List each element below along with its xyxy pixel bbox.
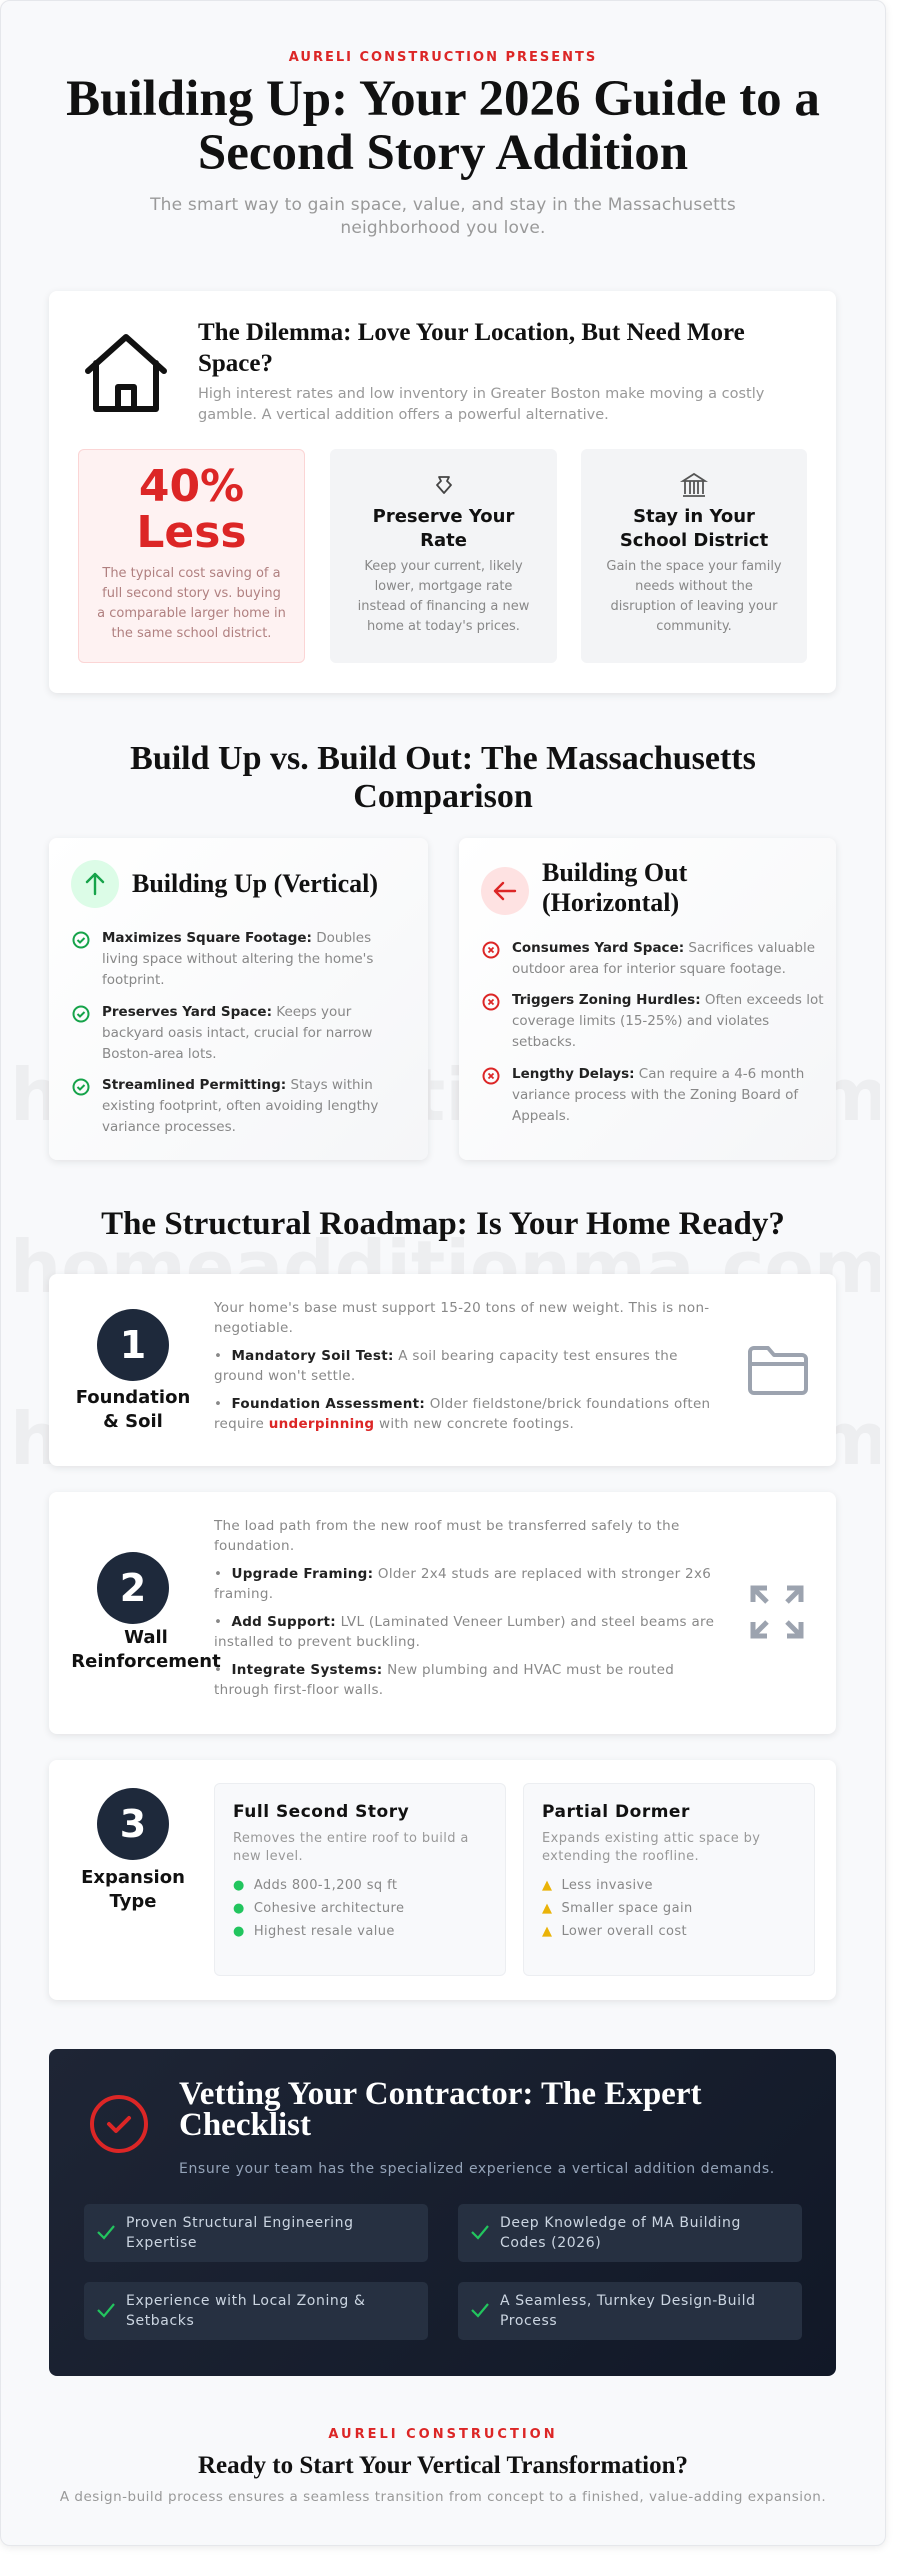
stat: school district <box>581 449 807 663</box>
check item 2 <box>458 2204 802 2262</box>
label: Expansion <box>81 1867 185 1888</box>
text <box>214 1518 714 1698</box>
heading: (Horizontal) <box>542 888 679 917</box>
badge 1: 1 <box>120 1323 146 1367</box>
subcard: full second story: ● Adds 800-1,200 sq ft <box>233 1878 397 1893</box>
stat: school district: Stay in Your <box>633 506 755 527</box>
heading: dilemma: The Dilemma: Love Your Location, But Need More Space? <box>198 319 745 377</box>
panel: step 1 foundation <box>49 1274 836 1466</box>
icon: folder <box>748 1346 808 1395</box>
stat: preserve rate: Keep your current, likely lower, mortgage rate instead of financing a new home at today's prices. <box>358 559 529 634</box>
subcard: full second story <box>214 1783 506 1976</box>
icon: expand arrows <box>750 1586 804 1638</box>
item 1: Maximizes Square Footage: Doubles living space without altering the home's footprint. <box>102 930 373 988</box>
subcard: full second story: ● Cohesive architecture <box>233 1901 404 1916</box>
subtitle: The smart way to gain space, value, and stay in the Massachusetts neighborhood you love. <box>150 195 736 238</box>
subcard: full second story: Removes the entire roof to build a new level. <box>233 1831 469 1864</box>
label <box>81 1867 185 1912</box>
badge 3: 3 <box>120 1802 146 1846</box>
subtext: Ensure your team has the specialized experience a vertical addition demands. <box>179 2161 775 2177</box>
panel: building out <box>459 838 836 1160</box>
text: Your home's base must support 15-20 tons of new weight. This is non-negotiable. <box>214 1300 709 1336</box>
icon: check circle <box>90 2095 148 2153</box>
badge 2: 2 <box>120 1566 146 1610</box>
label <box>76 1387 190 1432</box>
panel: dilemma <box>49 291 836 693</box>
text: • Mandatory Soil Test: A soil bearing capacity test ensures the ground won't settle. <box>214 1348 678 1384</box>
item 2: Preserves Yard Space: Keeps your backyard oasis intact, crucial for narrow Boston-area lots. <box>102 1004 372 1062</box>
check item 2: Deep Knowledge of MA Building Codes (2026) <box>500 2215 741 2251</box>
icon: school building <box>680 473 708 497</box>
item 3: Lengthy Delays: Can require a 4-6 month variance process with the Zoning Board of Appeals. <box>512 1066 804 1124</box>
text: • Foundation Assessment: Older fieldstone/brick foundations often require underpinning with new concrete footings. <box>214 1396 710 1432</box>
badge 1 <box>97 1309 169 1381</box>
stat: 40% less: The typical cost saving of a full second story vs. buying a comparable larger home in the same school district. <box>97 566 286 641</box>
item 2: Triggers Zoning Hurdles: Often exceeds lot coverage limits (15-25%) and violates setbacks. <box>512 992 824 1050</box>
check item 4: A Seamless, Turnkey Design-Build Process <box>500 2293 756 2329</box>
icon: house <box>85 334 167 412</box>
check item 1 <box>84 2204 428 2262</box>
check item 3: Experience with Local Zoning & Setbacks <box>126 2293 365 2329</box>
icon: up arrow <box>71 860 119 908</box>
stat: preserve rate: Rate <box>420 530 467 551</box>
icon: left arrow <box>481 867 529 915</box>
stat: preserve rate <box>330 449 557 663</box>
item 3: Streamlined Permitting: Stays within existing footprint, often avoiding lengthy variance processes. <box>102 1077 378 1135</box>
text: homeadditionma.com <box>10 1397 880 1481</box>
stat: school district: Gain the space your family needs without the disruption of leaving your community. <box>606 559 782 634</box>
text: The load path from the new roof must be transferred safely to the foundation. <box>214 1518 680 1554</box>
subcard: partial dormer: Partial Dormer <box>542 1802 690 1822</box>
footer heading: Ready to Start Your Vertical Transformation? <box>198 2452 688 2479</box>
subcard: partial dormer: ▲ Lower overall cost <box>542 1924 687 1939</box>
badge 2 <box>97 1552 169 1624</box>
heading: comparison: Build Up vs. Build Out: The Massachusetts Comparison <box>130 740 756 815</box>
stat: 40% less: Less <box>136 507 247 558</box>
subcard: partial dormer: Expands existing attic space by extending the roofline. <box>542 1831 760 1864</box>
stat: 40% less: 40% <box>139 461 244 512</box>
panel: building up <box>49 838 428 1160</box>
badge 3 <box>97 1788 169 1860</box>
label: Wall <box>124 1627 168 1648</box>
subcard: full second story: Full Second Story <box>233 1802 409 1822</box>
text: homeadditionma.com <box>10 1225 880 1309</box>
stat: 40% less <box>78 449 305 663</box>
heading: Building Up (Vertical) <box>132 869 378 898</box>
text <box>214 1300 710 1432</box>
label: Reinforcement <box>71 1651 221 1672</box>
subcard: full second story: ● Highest resale value <box>233 1924 395 1939</box>
check item 1: Proven Structural Engineering Expertise <box>126 2215 354 2251</box>
text: • Upgrade Framing: Older 2x4 studs are replaced with stronger 2x6 framing. <box>214 1566 711 1602</box>
label: & Soil <box>103 1411 163 1432</box>
heading: Building Out <box>542 858 687 887</box>
text: homeadditionma.com <box>10 1053 880 1137</box>
label: Foundation <box>76 1387 190 1408</box>
stat: school district: School District <box>620 530 768 551</box>
label <box>71 1627 221 1672</box>
heading: Vetting Your Contractor: The Expert Checklist <box>179 2076 701 2143</box>
footer brand: AURELI CONSTRUCTION <box>328 2427 558 2442</box>
panel: contractor checklist <box>49 2049 836 2376</box>
subcard: partial dormer: ▲ Less invasive <box>542 1878 653 1893</box>
check item 3 <box>84 2282 428 2340</box>
panel: step 2 walls <box>49 1492 836 1734</box>
subcard: partial dormer: ▲ Smaller space gain <box>542 1901 693 1916</box>
label: Type <box>110 1891 156 1912</box>
heading: roadmap: The Structural Roadmap: Is Your Home Ready? <box>101 1206 785 1242</box>
panel: step 3 expansion <box>49 1760 836 2000</box>
title: Building Up: Your 2026 Guide to a Second Story Addition <box>66 71 820 181</box>
heading <box>542 858 688 917</box>
stat: preserve rate: Preserve Your <box>373 506 514 527</box>
item 1: Consumes Yard Space: Sacrifices valuable outdoor area for interior square footage. <box>512 940 815 977</box>
icon: piggy <box>436 476 452 494</box>
footer text: A design-build process ensures a seamless transition from concept to a finished, value-adding expansion. <box>60 2489 826 2505</box>
check item 4 <box>458 2282 802 2340</box>
eyebrow label: AURELI CONSTRUCTION PRESENTS <box>289 50 597 65</box>
text: • Integrate Systems: New plumbing and HVAC must be routed through first-floor walls. <box>214 1662 674 1698</box>
subcard: partial dormer <box>523 1783 815 1976</box>
text: • Add Support: LVL (Laminated Veneer Lumber) and steel beams are installed to prevent buckling. <box>214 1614 714 1650</box>
text: dilemma intro: High interest rates and low inventory in Greater Boston make moving a costly gamble. A vertical addition offers a powerful alternative. <box>198 386 764 423</box>
